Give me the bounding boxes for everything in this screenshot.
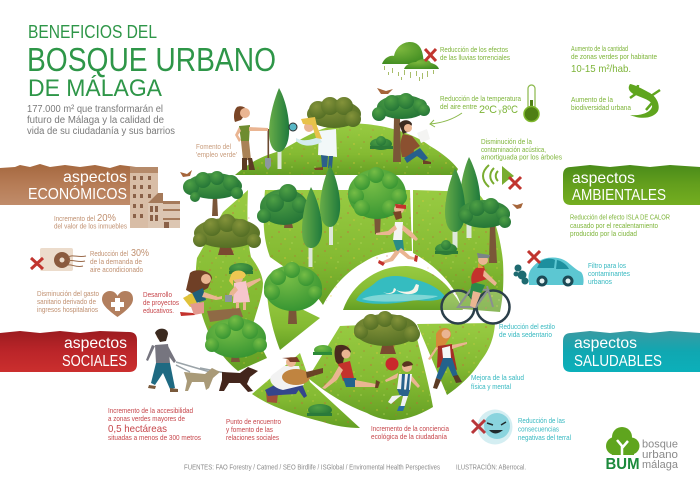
person: seated woman (322, 345, 380, 389)
lawn: centre block (264, 190, 412, 305)
text: torrential rains: Reducción de los efectos (440, 45, 508, 54)
tree: cypress left top (269, 88, 289, 169)
text: AC demand: Reducción del (90, 249, 128, 258)
text: ecological awareness: Incremento de la conciencia (371, 424, 450, 433)
text: health spending: ingresos hospitalarios (37, 305, 98, 314)
text: noise: contaminación acústica, (481, 145, 546, 154)
lawn: pond area (343, 266, 463, 310)
text: torrential rains (440, 45, 510, 62)
dog: tan (184, 368, 220, 391)
bird right (512, 203, 523, 209)
banner: environmental: aspectos (572, 170, 635, 187)
subtitle: vida de su ciudadanía y sus barrios (27, 126, 175, 137)
text: terral: Reducción de las (518, 416, 565, 425)
tree: olive bottom (354, 311, 420, 354)
pond with ducks (356, 276, 444, 304)
duck large (396, 284, 419, 294)
text: temperature reduction: 2ºC (479, 104, 497, 116)
text: health spending: Disminución del gasto (37, 289, 99, 298)
text: accessibility: situadas a menos de 300 metros (108, 433, 201, 442)
banner: social (0, 331, 137, 372)
banner: health (563, 331, 700, 372)
text: noise: Disminución de la (481, 137, 533, 146)
lawn: top hill (235, 123, 458, 175)
person: scientist with magnifier (289, 117, 337, 170)
icon: sound crossed (483, 165, 521, 189)
logo: bosque (642, 438, 678, 450)
person: cyclist on bike (442, 253, 510, 324)
person: gardener with shovel (234, 106, 271, 170)
park map (180, 88, 511, 428)
arrow: temperature to tree (430, 113, 462, 127)
text: AC demand (90, 247, 149, 274)
sources: FUENTES: FAO Forestry / Catmed / SEO Birdlife / ISGlobal / Enviromental Health Perspectives (184, 462, 440, 472)
text: green area per inhabitant: Aumento de la cantidad (571, 44, 628, 53)
text: property value: del valor de los inmuebles (54, 222, 127, 230)
text: green area per inhabitant: de zonas verdes por habitante (571, 52, 657, 61)
text: educational projects (143, 290, 179, 315)
tree: umbrella pine top right (372, 93, 430, 162)
text: torrential rains: de las lluvias torrenciales (440, 53, 510, 62)
tree: cypresses right (445, 157, 480, 248)
flower speckles (197, 125, 503, 428)
icon: rain cloud crossed (382, 42, 439, 81)
icon: heart with cross (102, 291, 133, 317)
text: sedentary: de vida sedentario (499, 330, 552, 339)
lawn: right wedge (417, 323, 495, 395)
icon: thermometer (524, 85, 539, 122)
text: sedentary (499, 322, 555, 339)
text: green jobs: Fomento del (196, 142, 231, 151)
text: educational projects: Desarrollo (143, 290, 172, 299)
text: biodiversity: Aumento de la (571, 95, 614, 104)
text: green area per inhabitant (571, 44, 657, 75)
sources: ILUSTRACIÓN: ABerrocal. (456, 462, 526, 472)
banner: health: SALUDABLES (574, 353, 662, 370)
subtitle: 177.000 m² que transformarán el (27, 104, 163, 115)
tree: bright bottom-left (205, 315, 267, 362)
bush small top (370, 136, 393, 150)
text: meeting point: relaciones sociales (226, 433, 279, 442)
text: mental health (471, 373, 524, 391)
dog: dark (219, 367, 258, 392)
tree: cypress centre low (302, 187, 322, 267)
logo (606, 427, 679, 473)
text: AC demand: aire acondicionado (90, 265, 143, 274)
person: man reading under tree (399, 120, 431, 164)
bush behind girl (229, 263, 253, 275)
logo: málaga (642, 459, 679, 471)
bush bottom centre (313, 345, 332, 355)
logo: BUM (606, 456, 640, 473)
tree: left pine (183, 171, 243, 216)
banner: environmental (563, 165, 700, 205)
ball (386, 358, 398, 370)
text: property value: 20% (97, 212, 116, 224)
icon: air conditioner crossed (31, 248, 86, 271)
text: mental health: Mejora de la salud (471, 373, 524, 382)
lawn: small wedge (267, 292, 320, 350)
bush bottom (307, 404, 332, 416)
text: heat island: producido por la ciudad (570, 229, 637, 238)
text: meeting point (226, 417, 281, 442)
lawn: left strip (196, 190, 267, 371)
text: noise: amortiguada por los árboles (481, 152, 562, 162)
tree: cypress centre high (320, 165, 340, 245)
tree: right pine (458, 198, 511, 263)
lawn: right block (413, 190, 503, 312)
text: biodiversity (571, 95, 632, 112)
text: mental health: física y mental (471, 382, 511, 391)
banner: environmental: AMBIENTALES (572, 187, 666, 204)
text: property value: Incremento del (54, 214, 95, 223)
text: terral: consecuencias (518, 424, 559, 434)
text: educational projects: educativos. (143, 306, 174, 315)
text: pollutant filter: Filtro para los (588, 261, 626, 270)
banner: social: SOCIALES (62, 353, 127, 370)
text: terral: negativas del terral (518, 433, 571, 442)
tree: olive left (193, 214, 261, 255)
text: pollutant filter: urbanos (588, 277, 612, 286)
text: terral (518, 416, 571, 442)
bush small right (435, 240, 458, 255)
text: heat island (570, 212, 670, 238)
text: temperature reduction (440, 94, 522, 116)
text: pollutant filter: contaminantes (588, 269, 630, 278)
text: accessibility: Incremento de la accesibilidad (108, 406, 193, 415)
text: biodiversity: biodiversidad urbana (571, 103, 632, 112)
lawn: bottom-left strip (252, 353, 360, 428)
icon: buildings (130, 167, 180, 228)
text: temperature reduction: 8ºC (502, 104, 518, 116)
bird left (180, 170, 192, 177)
text: heat island: Reducción del efecto ISLA DE CALOR (570, 212, 670, 222)
text: AC demand: de la demanda de (90, 257, 142, 266)
title: DE MÁLAGA (28, 75, 162, 102)
lawn: bottom block (308, 323, 433, 420)
text: temperature reduction: y (498, 109, 502, 115)
text: temperature reduction: Reducción de la temperatura (440, 94, 522, 103)
person: girl with watering can (225, 270, 261, 310)
text: heat island: causado por el recalentamiento (570, 221, 658, 230)
banner: economic (0, 164, 136, 205)
person: runner (376, 204, 418, 266)
bird top (377, 88, 393, 94)
icon: gecko (629, 84, 660, 118)
text: noise (481, 137, 562, 162)
text: meeting point: Punto de encuentro (226, 417, 281, 426)
text: green jobs (196, 142, 238, 159)
text: health spending: sanitario derivado de (37, 297, 96, 306)
banner: social: aspectos (64, 335, 127, 352)
tree: big bright (348, 167, 407, 234)
duck small (383, 288, 396, 294)
person: boy with football kit (385, 361, 420, 411)
subtitle (27, 104, 175, 137)
banner: economic: aspectos (63, 169, 127, 186)
tree: centre dark (257, 184, 308, 228)
text: accessibility: a zonas verdes mayores de (108, 414, 185, 423)
text: meeting point: y fomento de las (226, 425, 273, 434)
text: ecological awareness (371, 424, 450, 441)
person: crouching woman (180, 270, 222, 316)
subtitle: futuro de Málaga y la calidad de (27, 115, 164, 126)
text: pollutant filter (588, 261, 630, 286)
text: sedentary: Reducción del estilo (499, 322, 555, 331)
text: educational projects: de proyectos (143, 298, 179, 307)
text: green area per inhabitant: 10-15 m²/hab. (571, 63, 631, 75)
logo: urbano (642, 449, 678, 461)
person: woman walking dogs (146, 329, 230, 392)
text: property value (54, 212, 127, 230)
text: ecological awareness: ecológica de la ciudadanía (371, 432, 448, 441)
icon: terral dust face crossed (472, 410, 512, 444)
text: health spending (37, 289, 99, 314)
person: guitarist (265, 357, 323, 403)
banner: economic: ECONÓMICOS (28, 186, 127, 203)
text: temperature reduction: del aire entre (440, 102, 477, 111)
text: AC demand: 30% (131, 247, 149, 259)
text: green jobs: 'empleo verde' (196, 150, 238, 159)
icon: car with smoke crossed (514, 251, 584, 286)
person: standing woman (428, 328, 467, 389)
text: accessibility: 0,5 hectáreas (108, 423, 167, 435)
soil patch (207, 308, 243, 322)
tree: bright middle (264, 262, 322, 324)
title (27, 21, 276, 102)
title: BOSQUE URBANO (27, 41, 276, 78)
banner: health: aspectos (574, 335, 637, 352)
title: BENEFICIOS DEL (28, 21, 157, 42)
tree: olive bush top (307, 97, 361, 128)
text: accessibility (108, 406, 201, 442)
